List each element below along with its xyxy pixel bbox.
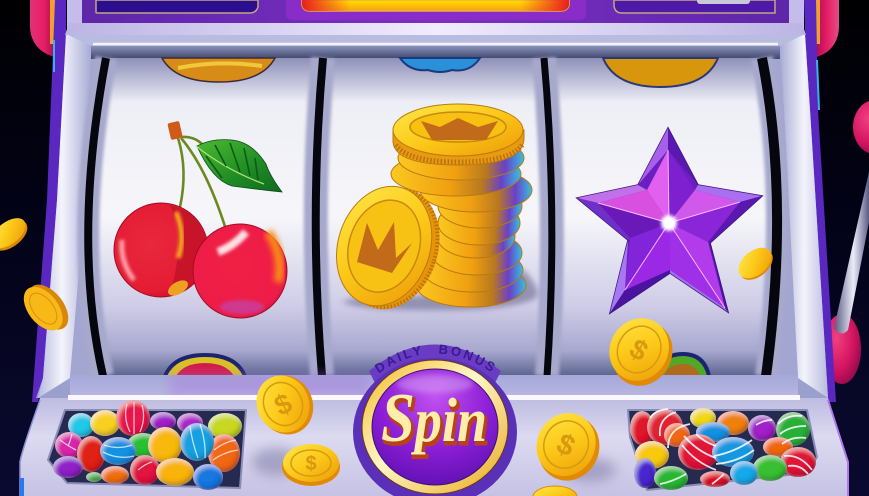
gold coin lower left of button: $	[305, 453, 317, 475]
center display	[302, 0, 569, 11]
right side pink cap	[816, 0, 839, 57]
reel dividers	[88, 58, 777, 376]
right cherry	[193, 224, 287, 318]
reel peeking symbols	[162, 58, 718, 376]
silver frame	[36, 23, 828, 398]
crown on leaning coin	[357, 222, 412, 273]
stack shadow	[342, 270, 538, 310]
right display	[614, 0, 775, 13]
cherry stems	[178, 137, 228, 236]
lever	[823, 100, 869, 384]
candy highlights	[60, 402, 238, 470]
spin label shadow: Spin	[383, 383, 489, 460]
cherries	[114, 121, 287, 318]
window recess	[70, 46, 798, 378]
left side pink cap	[30, 0, 55, 57]
right display pill	[697, 0, 750, 4]
daily bonus text: DAILY BONUS	[374, 344, 494, 373]
top purple panel	[67, 0, 804, 34]
center display frame	[286, 0, 586, 20]
gold coin left of button	[247, 365, 323, 444]
candy stripes	[650, 409, 812, 484]
left cherry	[114, 203, 208, 299]
button base	[353, 358, 517, 496]
spin label: Spin	[381, 380, 487, 457]
gold ring	[362, 360, 508, 494]
cabinet side strips	[32, 0, 836, 402]
cherry cork	[167, 121, 183, 140]
crown on top coin	[421, 118, 498, 140]
flying coin left upper	[0, 212, 33, 257]
button face	[372, 369, 498, 485]
gold coin over reel three: $	[624, 333, 654, 367]
star facets	[598, 150, 740, 308]
ledge	[70, 375, 798, 396]
gold coin right of button: $	[552, 428, 580, 463]
reel silver edges	[88, 58, 777, 376]
spin button	[353, 344, 517, 496]
leaf	[196, 140, 282, 192]
gold coin right of button	[525, 403, 610, 491]
leaning coin	[321, 173, 455, 322]
purple star	[577, 128, 762, 313]
daily bonus banner	[369, 344, 501, 385]
flying coin left lower	[16, 277, 76, 340]
coin stack	[321, 104, 538, 322]
left display	[96, 0, 258, 13]
candy tray right	[628, 408, 817, 490]
coin shadows	[252, 448, 616, 482]
lower panel	[20, 395, 848, 496]
candy tray left	[48, 400, 246, 490]
small gold coin right	[733, 242, 779, 286]
gold coin over reel three	[597, 307, 685, 397]
gold coin lower left of button	[282, 444, 340, 486]
gold coin bottom edge	[533, 486, 577, 496]
gold coin left of button: $	[270, 387, 297, 422]
window shade	[91, 46, 780, 59]
reels	[88, 58, 777, 376]
